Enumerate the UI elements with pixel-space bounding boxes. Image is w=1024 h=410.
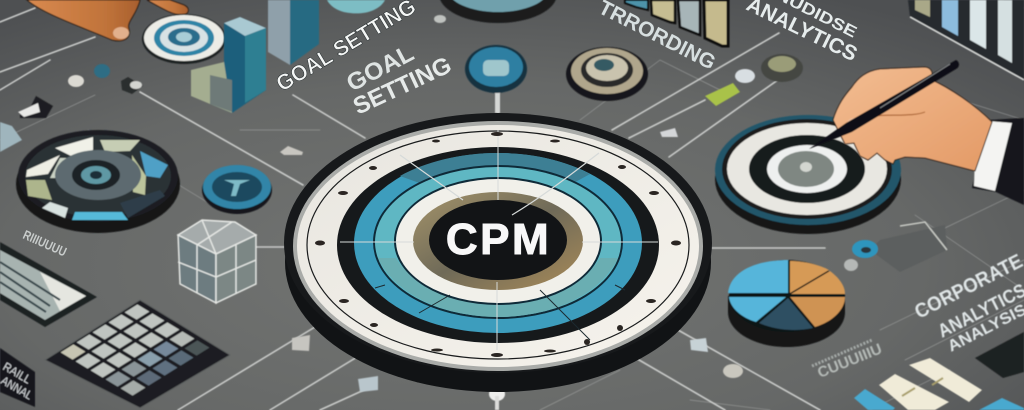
blue ring upper shading <box>400 153 590 185</box>
top centre disc <box>439 0 557 23</box>
striped building <box>268 0 319 65</box>
striped panel <box>0 242 97 327</box>
dark label bottom left <box>0 348 35 407</box>
small scribble label: RIIIUUUU <box>21 227 69 259</box>
teal ring <box>375 167 621 317</box>
chart: pie <box>728 260 845 347</box>
calculator <box>45 300 230 408</box>
blue cube <box>191 17 266 113</box>
heading: corporate analytics: ANALYSIS <box>945 301 1024 356</box>
black core <box>429 200 567 280</box>
swirl disc <box>566 47 648 101</box>
gold ring <box>413 192 583 290</box>
black ring <box>337 147 659 343</box>
outer blue ring <box>354 153 642 333</box>
scribble bars: CUUUIIIU <box>815 340 885 382</box>
small markers <box>0 15 743 410</box>
central CPM dial <box>284 113 712 392</box>
small blue disc <box>202 165 272 214</box>
small swirl button and tags <box>660 54 803 137</box>
dial base <box>285 132 711 392</box>
right target disc <box>715 115 901 234</box>
hook tag <box>844 222 947 272</box>
heading: setting: SETTING <box>349 52 456 120</box>
hand holding pen <box>809 60 1024 205</box>
bottom right tiles <box>854 358 1024 410</box>
top centre bars <box>625 0 728 46</box>
blue pin <box>465 45 527 113</box>
left mosaic disc <box>16 130 180 233</box>
small target disc <box>142 14 226 64</box>
dial tick marks <box>315 132 681 357</box>
chart: top right bars <box>908 0 1024 80</box>
white ring <box>297 125 699 367</box>
hand: top left <box>27 0 188 41</box>
heading: goal: GOAL <box>342 40 418 97</box>
dark device <box>975 332 1024 378</box>
teal ring lower shading <box>378 258 618 317</box>
CPM label: CPM <box>446 215 551 264</box>
icon: glass cube <box>178 220 256 303</box>
dial top edge <box>284 113 712 373</box>
dark label bottom left: RAILL <box>0 359 34 387</box>
dial spokes <box>340 130 658 350</box>
inner white ring <box>396 179 600 303</box>
teal dish <box>327 0 385 13</box>
heading: corporate analytics <box>911 250 1024 356</box>
